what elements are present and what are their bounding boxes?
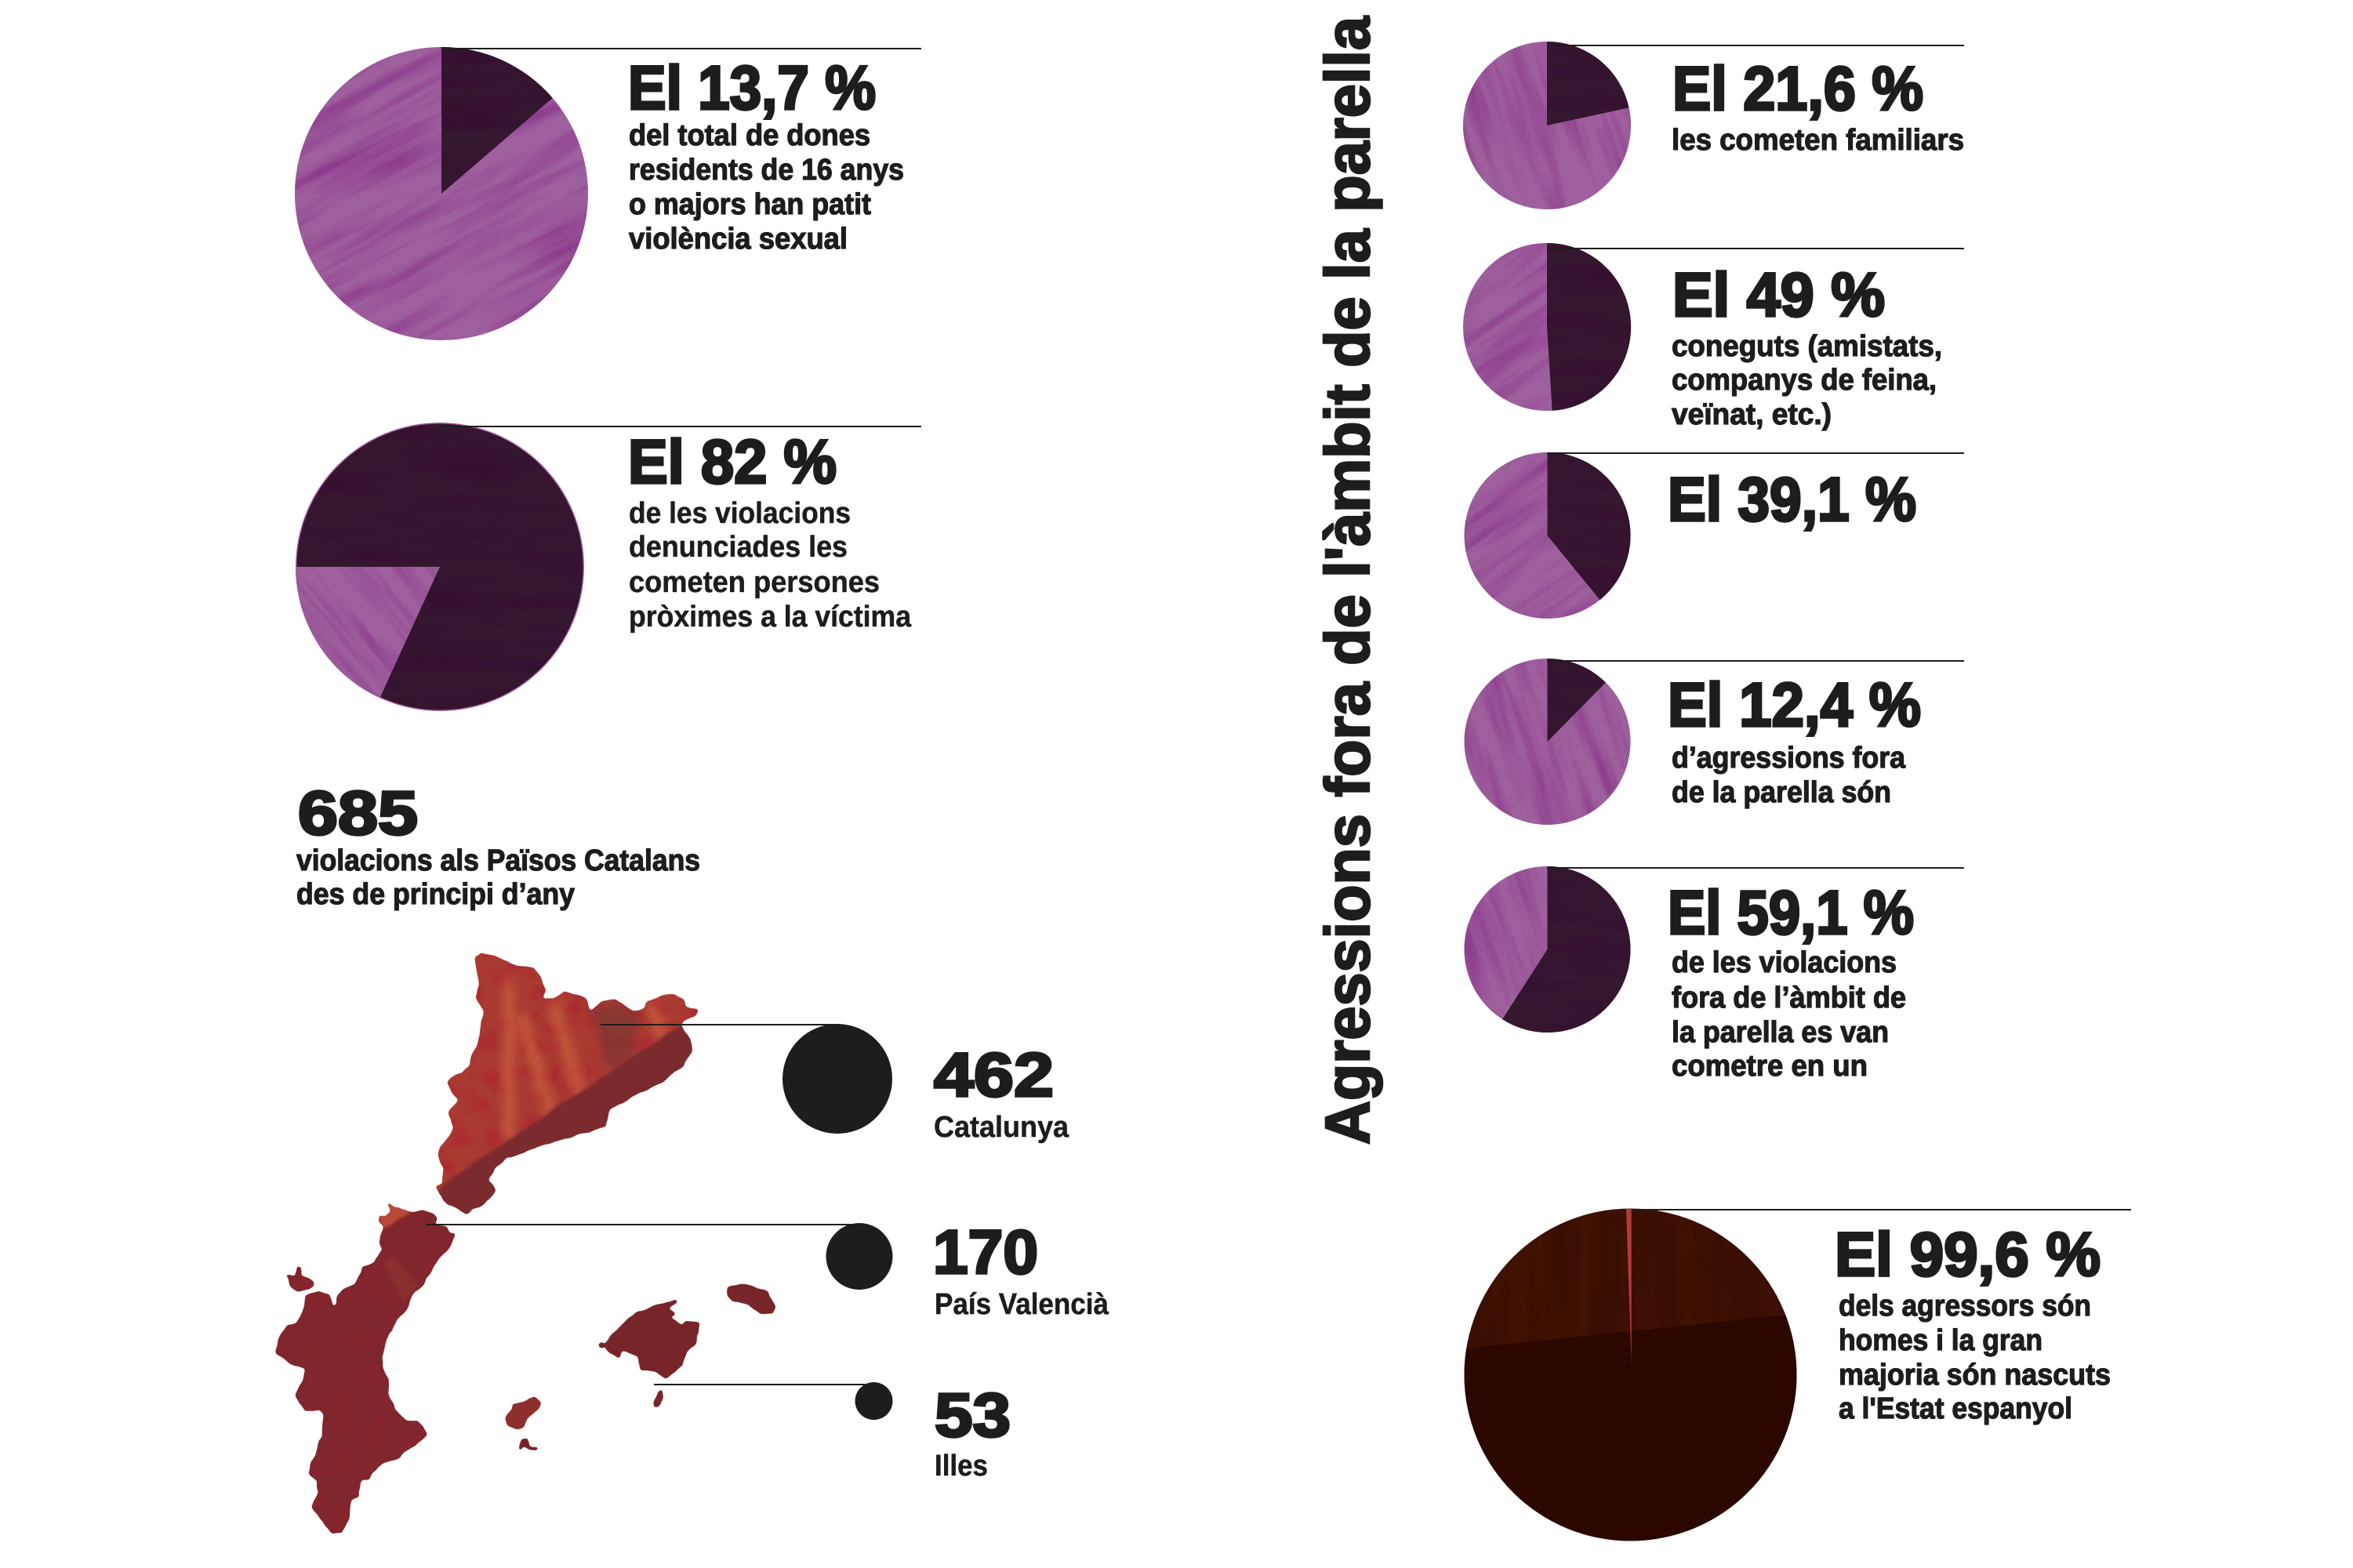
leader line <box>1547 867 1964 869</box>
pie chart: 39,1 % <box>1465 452 1631 619</box>
panel: 59,1 % <box>1371 777 1964 1125</box>
leader line <box>426 1224 859 1225</box>
island: Sa Dragonera <box>598 1342 605 1348</box>
number: 462 <box>934 1040 1054 1109</box>
legend item: Catalunya <box>601 1024 1069 1144</box>
panel: 49 % <box>1463 243 1964 431</box>
heading: El 13,7 % <box>628 53 876 122</box>
text block: de les violacions <box>629 497 851 530</box>
label: Catalunya <box>934 1111 1069 1144</box>
text block: veïnat, etc.) <box>1672 398 1832 431</box>
text block <box>629 497 912 633</box>
heading: El 99,6 % <box>1835 1219 2101 1289</box>
vertical title: Agressions fora de l'àmbit de la parella <box>1313 16 1382 1145</box>
island: Mallorca <box>605 1299 699 1379</box>
big number: 685 <box>298 778 418 848</box>
panel: 21,6 % <box>1463 42 1964 209</box>
text block: violacions als Països Catalans <box>296 844 700 877</box>
heading: El 39,1 % <box>1668 464 1916 534</box>
bubble <box>826 1223 892 1290</box>
panel: 13,7 % <box>295 47 921 340</box>
heading: El 82 % <box>628 426 837 496</box>
text block: dels agressors són <box>1839 1290 2091 1323</box>
leader line <box>601 1024 837 1025</box>
heading: El 49 % <box>1672 260 1885 329</box>
text block: de la parella són <box>1672 776 1891 809</box>
text block: del total de dones <box>629 119 870 152</box>
leader line <box>654 1384 873 1385</box>
text block <box>1672 330 1942 431</box>
leader line <box>440 426 921 427</box>
pie chart: 49 % <box>1463 243 1631 411</box>
pie chart: 13,7 % <box>295 47 588 340</box>
island: Formentera <box>520 1439 539 1450</box>
number: 53 <box>935 1380 1011 1450</box>
leader line <box>1547 45 1964 46</box>
heading: El 59,1 % <box>1668 877 1914 947</box>
panel: total 685 <box>296 778 700 911</box>
bubble <box>855 1382 892 1420</box>
text block: les cometen familiars <box>1672 124 1964 157</box>
pie chart: 99,6 % <box>1458 1203 1803 1548</box>
text block <box>629 119 904 256</box>
island: Cabrera <box>653 1390 662 1407</box>
text block: coneguts (amistats, <box>1672 330 1942 363</box>
region: Illes Balears <box>504 1284 775 1450</box>
pie chart: 82 % <box>296 423 584 711</box>
region: Catalunya <box>431 946 701 1221</box>
text block: la parella es van <box>1672 1016 1889 1049</box>
label: País Valencià <box>935 1288 1109 1321</box>
leader line <box>1547 660 1964 662</box>
text block: denunciades les <box>629 531 848 564</box>
text block <box>296 844 700 911</box>
text block: des de principi d’any <box>296 878 575 911</box>
legend item: Illes <box>654 1380 1011 1483</box>
heading: El 21,6 % <box>1672 53 1923 123</box>
bubble <box>783 1024 892 1134</box>
text block: majoria són nascuts <box>1839 1359 2111 1392</box>
text block: cometre en un <box>1672 1050 1868 1083</box>
region: País Valencià <box>272 1196 461 1536</box>
pie chart: 12,4 % <box>1368 570 1721 918</box>
infographic <box>275 15 2131 1541</box>
heading: El 12,4 % <box>1668 670 1921 739</box>
text block: o majors han patit <box>629 188 871 221</box>
text block <box>1672 946 1906 1083</box>
map <box>272 946 775 1536</box>
text block <box>1839 1290 2111 1425</box>
text block: cometen persones <box>629 566 880 599</box>
text block: pròximes a la víctima <box>629 601 912 633</box>
island: Eivissa <box>504 1396 540 1429</box>
text block: companys de feina, <box>1672 364 1937 397</box>
number: 170 <box>933 1217 1038 1287</box>
panel: 39,1 % <box>1465 452 1964 619</box>
island: Menorca <box>728 1284 775 1314</box>
text block: residents de 16 anys <box>629 154 904 187</box>
panel: 82 % <box>296 423 921 711</box>
pie chart: 21,6 % <box>1463 42 1631 209</box>
leader line <box>1547 452 1964 454</box>
text block: fora de l’àmbit de <box>1672 982 1906 1014</box>
text block <box>1672 742 1906 809</box>
pie chart: 59,1 % <box>1371 777 1725 1125</box>
legend item: País Valencià <box>426 1217 1109 1321</box>
leader line <box>1547 248 1964 249</box>
panel: 99,6 % <box>1458 1203 2131 1548</box>
text block: homes i la gran <box>1839 1324 2043 1357</box>
text block: d’agressions fora <box>1672 742 1906 775</box>
text block: a l'Estat espanyol <box>1839 1392 2072 1425</box>
leader line <box>441 48 921 49</box>
leader line <box>1632 1209 2131 1210</box>
text block: de les violacions <box>1672 946 1897 979</box>
label: Illes <box>935 1450 988 1483</box>
panel: 12,4 % <box>1368 570 1964 918</box>
text block: violència sexual <box>629 223 848 256</box>
